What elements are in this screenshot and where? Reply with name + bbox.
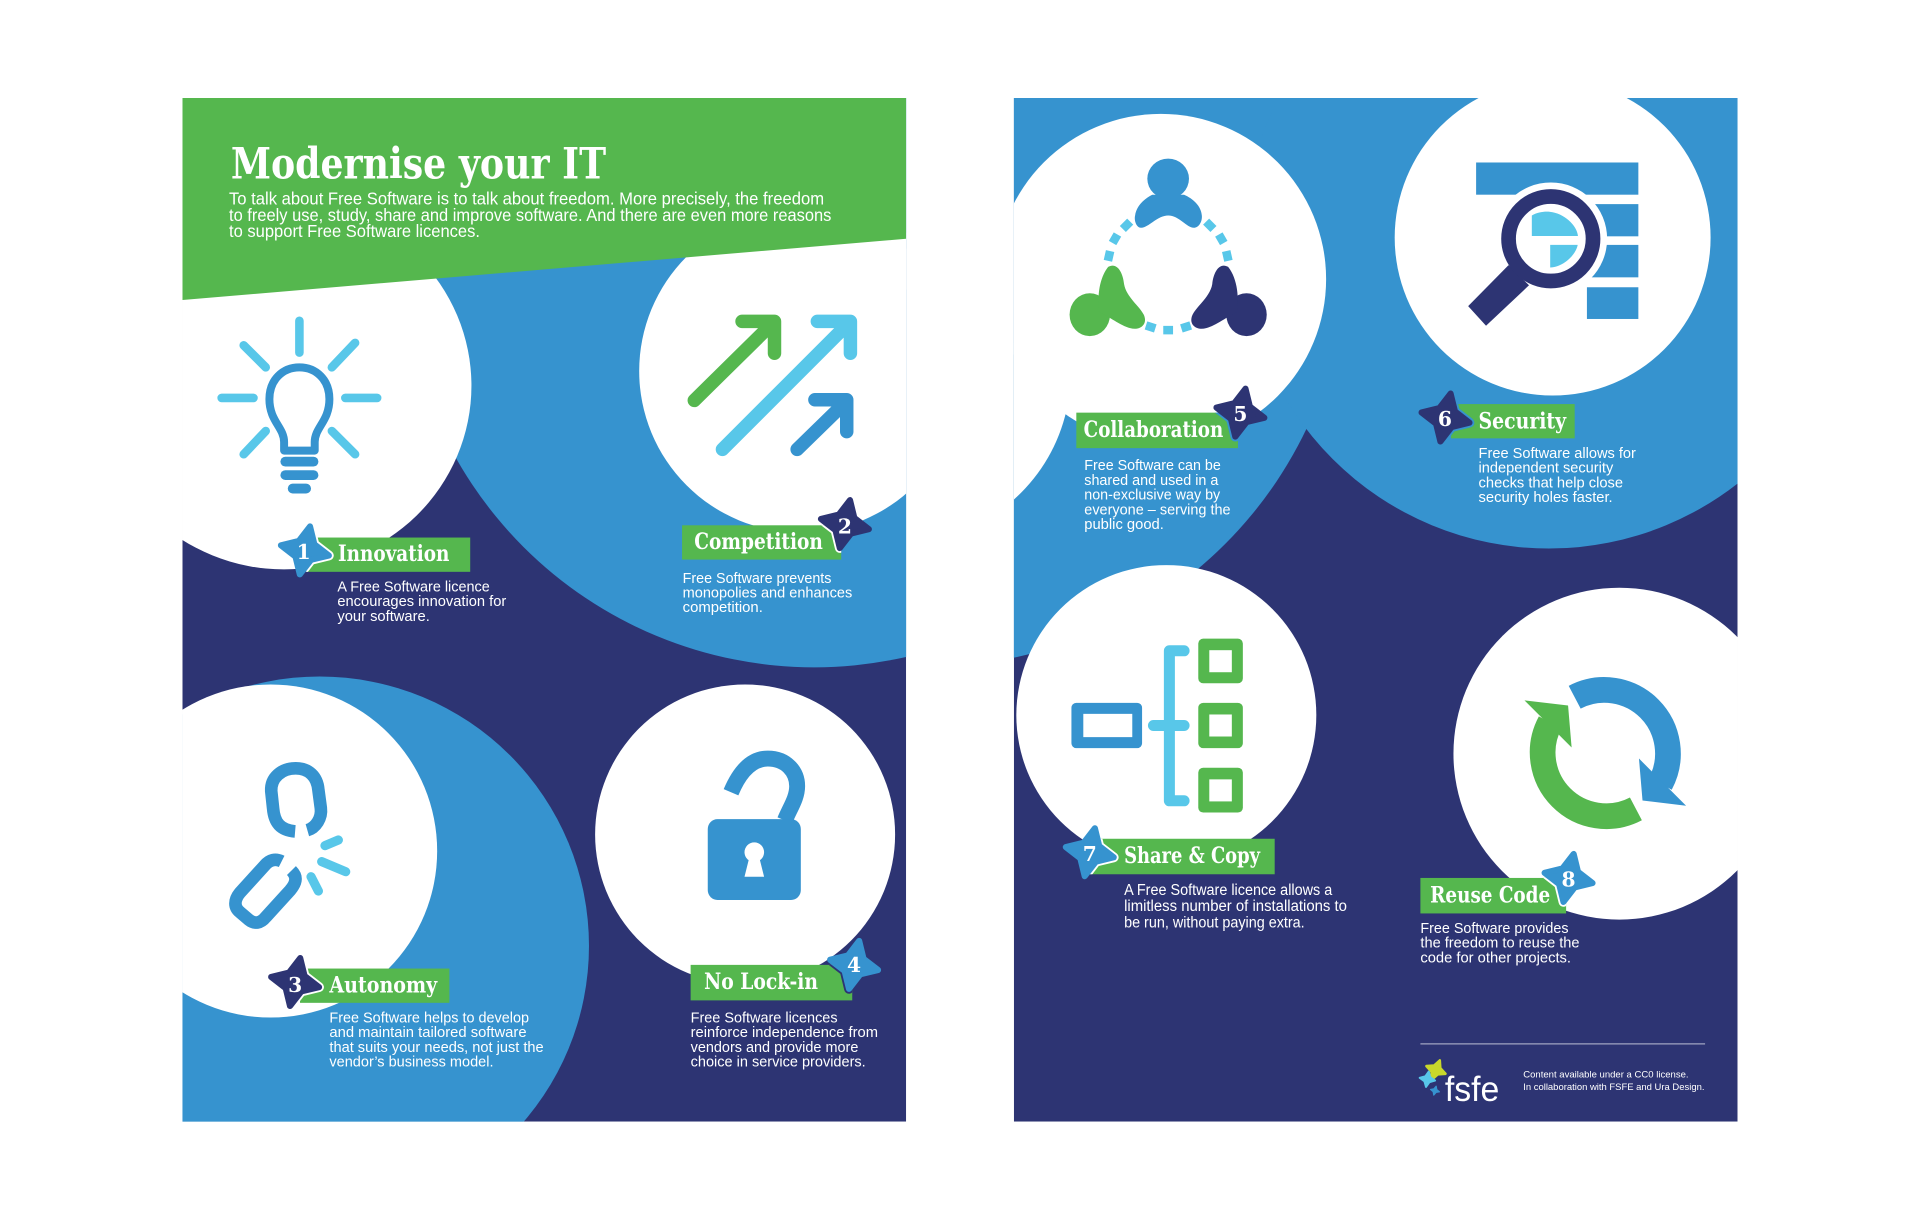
label: Autonomy: Autonomy	[329, 972, 438, 998]
label: Collaboration: Collaboration	[1084, 417, 1223, 443]
text: Security description: independent security	[1479, 460, 1614, 477]
text: Security description: security holes faster.	[1479, 489, 1613, 506]
header intro text	[229, 188, 832, 241]
header intro text: to freely use, study, share and improve software. And there are even more reasons	[229, 205, 832, 225]
icon: collaboration people	[1070, 159, 1267, 336]
label: Security	[1416, 388, 1575, 447]
text: Reuse Code description: the freedom to reuse the	[1420, 935, 1580, 952]
label: No Lock-in: No Lock-in	[704, 969, 818, 995]
panel: left page background	[182, 98, 906, 1122]
text: Reuse Code description	[1420, 920, 1580, 966]
text: Competition description: Free Software prevents	[683, 570, 832, 587]
text: No Lock-in description: vendors and provide more	[691, 1039, 858, 1056]
text: Innovation description: your software.	[337, 608, 430, 625]
logo: fsfe: fsfe	[1445, 1069, 1499, 1109]
logo: fsfe	[1418, 1057, 1499, 1109]
label: No Lock-in: 4	[847, 953, 861, 977]
text: No Lock-in description: Free Software licences	[691, 1009, 838, 1026]
text: No Lock-in description: choice in service providers.	[691, 1054, 866, 1071]
text: Collaboration description: non-exclusive way by	[1084, 487, 1221, 504]
text: Autonomy description: Free Software helps to develop	[329, 1009, 529, 1026]
text: Autonomy description: that suits your needs, not just the	[329, 1039, 544, 1056]
icon: reuse cycle arrows	[1524, 690, 1686, 816]
label: Innovation	[276, 521, 470, 579]
text: Collaboration description	[1084, 457, 1231, 533]
label: Competition: 2	[838, 514, 852, 538]
text: Share & Copy description: be run, without paying extra.	[1124, 915, 1305, 932]
text: Collaboration description: shared and used in a	[1084, 472, 1219, 489]
text: Security description: Free Software allows for	[1479, 445, 1636, 462]
label: Competition	[682, 495, 874, 560]
text: Autonomy description: and maintain tailored software	[329, 1024, 527, 1041]
label: Security: Security	[1479, 409, 1567, 435]
footer credit text: In collaboration with FSFE and Ura Design.	[1523, 1082, 1704, 1092]
icon: broken chain	[235, 768, 346, 923]
icon: growth arrows	[694, 321, 850, 449]
label: Share & Copy	[1061, 823, 1275, 881]
label: Reuse Code: Reuse Code	[1430, 882, 1550, 908]
text: Share & Copy description: A Free Software licence allows a	[1124, 882, 1332, 899]
label: Reuse Code: 8	[1562, 868, 1576, 892]
text: Innovation description: encourages innovation for	[337, 593, 506, 610]
text: No Lock-in description	[691, 1009, 878, 1071]
label: Autonomy	[266, 953, 449, 1011]
label: Competition: Competition	[694, 529, 823, 555]
header intro text: to support Free Software licences.	[229, 221, 480, 241]
label: Autonomy: 3	[288, 973, 302, 997]
text: Reuse Code description: Free Software provides	[1420, 920, 1569, 937]
label: Collaboration: 5	[1233, 402, 1247, 426]
text: Share & Copy description: limitless number of installations to	[1124, 898, 1347, 915]
text: Autonomy description	[329, 1009, 544, 1071]
label: Reuse Code	[1420, 849, 1598, 913]
label: Share & Copy: Share & Copy	[1124, 843, 1261, 869]
footer credit text: Content available under a CC0 license.	[1523, 1070, 1689, 1080]
icon: light bulb	[222, 321, 377, 493]
text: Competition description	[683, 570, 853, 616]
text: Innovation description: A Free Software licence	[337, 578, 490, 595]
label: Share & Copy: 7	[1083, 842, 1097, 866]
label: Innovation: Innovation	[338, 541, 449, 567]
text: Autonomy description: vendor’s business model.	[329, 1054, 493, 1071]
text: Share & Copy description	[1124, 882, 1347, 932]
panel: right page background	[1014, 98, 1738, 1122]
text: No Lock-in description: reinforce independence from	[691, 1024, 878, 1041]
header intro text: To talk about Free Software is to talk about freedom. More precisely, the freedom	[229, 188, 824, 208]
text: Security description: checks that help close	[1479, 474, 1623, 491]
label: No Lock-in	[691, 936, 883, 1000]
text: Collaboration description: public good.	[1084, 516, 1164, 533]
text: Security description	[1479, 445, 1636, 506]
label: Security: 6	[1438, 407, 1452, 431]
text: Reuse Code description: code for other projects.	[1420, 949, 1571, 966]
text: Collaboration description: Free Software can be	[1084, 457, 1221, 474]
text: Competition description: monopolies and enhances	[683, 585, 853, 602]
footer credit text	[1523, 1070, 1704, 1092]
label: Innovation: 1	[297, 540, 311, 564]
label: Collaboration	[1076, 384, 1269, 448]
icon: open padlock	[708, 759, 801, 900]
icon: security magnifier	[1468, 162, 1638, 326]
text: Innovation description	[337, 578, 506, 625]
title: Modernise your IT	[231, 138, 606, 189]
text: Collaboration description: everyone – serving the	[1084, 501, 1231, 518]
icon: share hierarchy	[1071, 639, 1243, 813]
text: Competition description: competition.	[683, 599, 763, 616]
